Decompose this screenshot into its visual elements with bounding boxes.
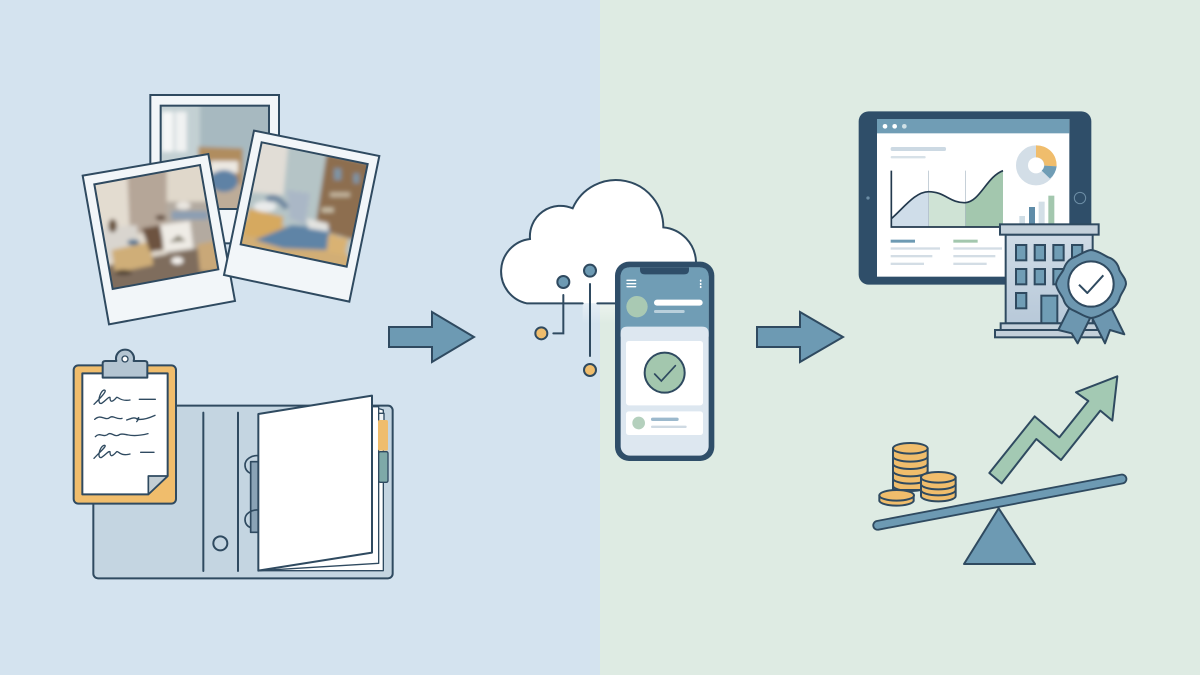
phone [615, 262, 714, 461]
binder tabs [378, 413, 388, 482]
phone header icons [627, 280, 701, 287]
handwritten notes [94, 390, 155, 458]
photo: back polaroid [147, 95, 280, 243]
seesaw beam [878, 479, 1122, 525]
verification card [626, 341, 703, 405]
short stack [879, 490, 914, 506]
balance and growth [878, 376, 1122, 564]
clipboard clip [103, 350, 147, 378]
front page [258, 396, 372, 571]
fulcrum [964, 508, 1035, 564]
photo: right polaroid [224, 128, 379, 302]
clipboard [74, 350, 176, 504]
arrow: left to centre [389, 312, 474, 362]
growth arrow [989, 376, 1117, 483]
tall stack [893, 443, 928, 491]
binder and clipboard [74, 350, 393, 578]
certification badge [1056, 250, 1126, 343]
network connectors [535, 265, 596, 376]
panel: right background [600, 0, 1200, 675]
medium stack [921, 472, 956, 501]
photo stack [83, 95, 379, 324]
cloud and phone [501, 180, 714, 461]
loose pages [258, 407, 383, 571]
text rows [891, 240, 1002, 265]
area chart [891, 171, 1003, 227]
cloud [501, 180, 696, 324]
donut chart [1022, 145, 1057, 179]
tablet [859, 111, 1091, 285]
panel: left background [0, 0, 600, 675]
bar chart [1019, 196, 1054, 226]
tablet, building and badge [859, 111, 1126, 343]
list card [626, 411, 703, 435]
building [995, 224, 1102, 337]
coin stacks [879, 443, 956, 506]
binder [93, 396, 393, 578]
photo: left polaroid [83, 154, 235, 324]
arrow: centre to right [757, 312, 843, 362]
